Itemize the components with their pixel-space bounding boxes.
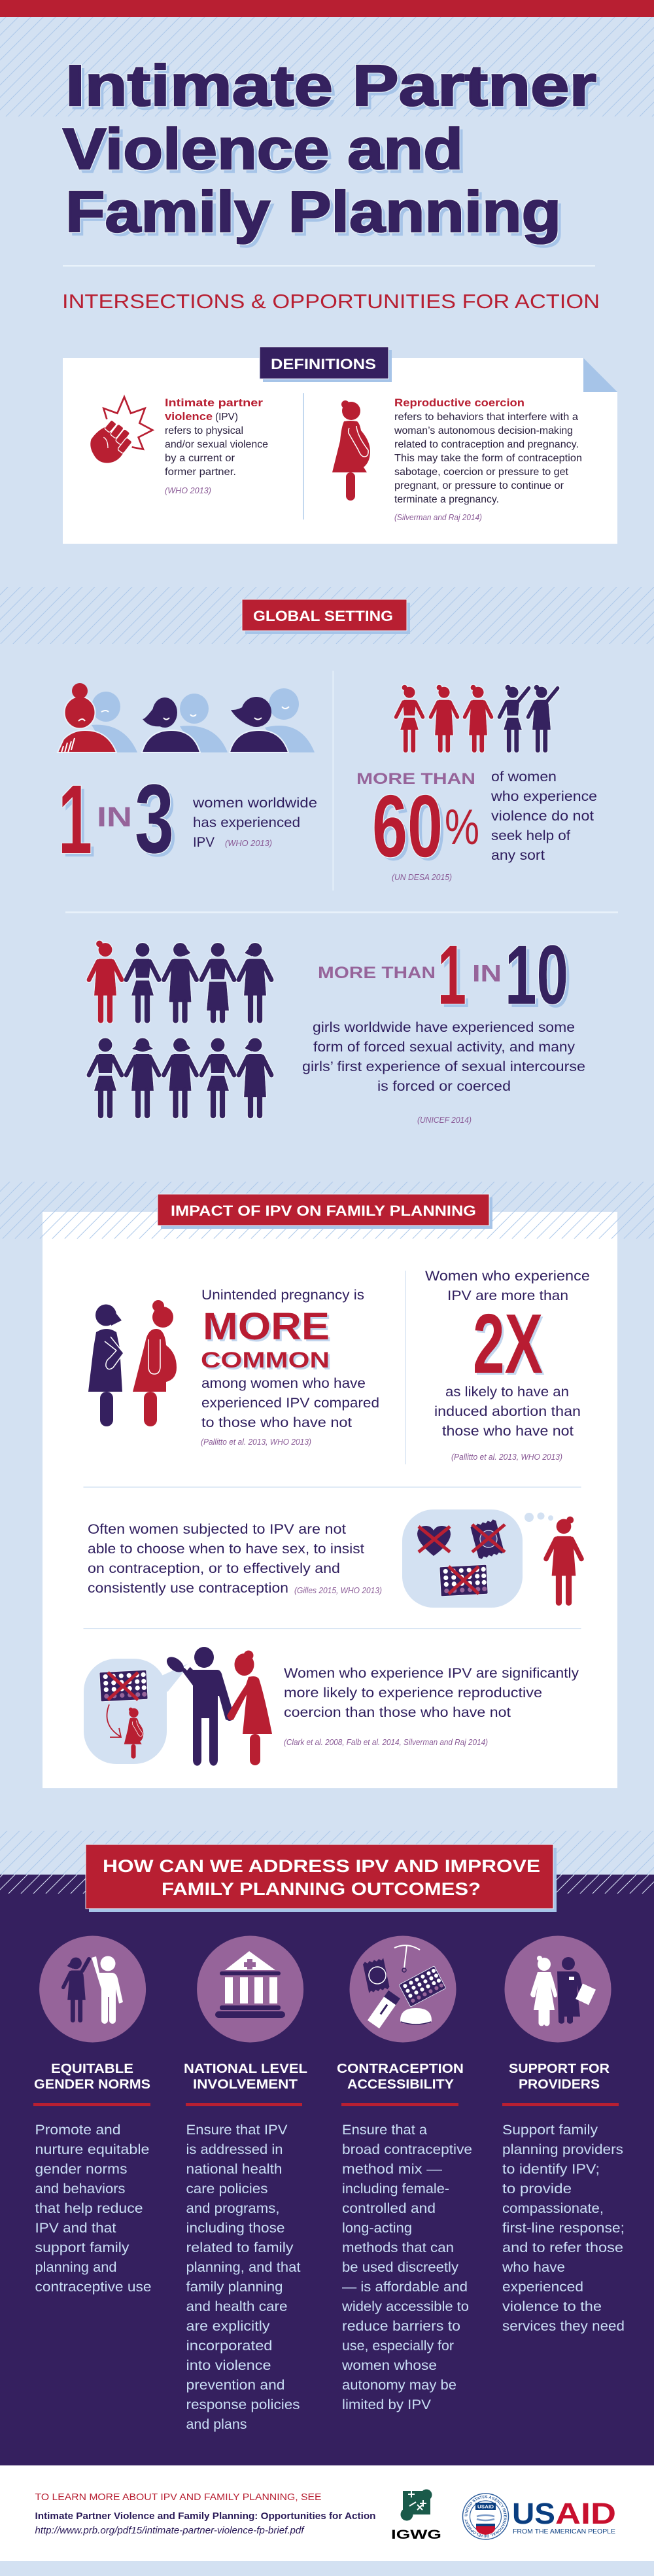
text: 2X as likely: induced abortion than xyxy=(434,1404,581,1419)
text: reproductive coercion likelihood xyxy=(284,1666,579,1747)
icon: people in pairs xyxy=(58,683,315,752)
column: contraception accessibility: use, especially for xyxy=(342,2338,454,2354)
text: often women xyxy=(88,1522,382,1596)
column: national level involvement: related to family xyxy=(186,2240,294,2255)
text: girls worldwide: girls’ first experience of sexual intercourse xyxy=(302,1059,585,1074)
column: national level involvement: Ensure that IPV xyxy=(186,2123,288,2138)
stat: 1 in 3 xyxy=(58,764,174,874)
definition: reproductive coercion: refers to behaviors that interfere with a xyxy=(394,412,578,423)
icon: crossed heart xyxy=(417,1526,451,1556)
text: 2X as likely xyxy=(425,1269,590,1462)
text: of women: of women xyxy=(491,769,557,785)
column: equitable gender norms: nurture equitable xyxy=(35,2142,149,2157)
definition: intimate partner violence: former partner. xyxy=(165,467,236,478)
logo: IGWG xyxy=(391,2489,441,2542)
definition: reproductive coercion: (Silverman and Raj 2014) xyxy=(394,513,482,522)
column: equitable gender norms: and behaviors xyxy=(35,2181,126,2197)
text: often women: on contraception, or to effectively and xyxy=(88,1561,340,1576)
logo: USAID wordmark: FROM THE AMERICAN PEOPLE xyxy=(513,2528,615,2535)
text: of women: who experience xyxy=(490,789,597,804)
definition: intimate partner violence: (IPV) xyxy=(215,412,238,423)
text: reproductive coercion likelihood: more likely to experience reproductive xyxy=(284,1685,542,1701)
footer text: http://www.prb.org/pdf15/intimate-partner-violence-fp-brief.pdf xyxy=(35,2525,305,2536)
text: women worldwide: women worldwide xyxy=(192,796,317,811)
panel: impact of IPV on family planning xyxy=(0,1182,654,1788)
icon: crossed condom xyxy=(470,1519,505,1560)
definitions heading: DEFINITIONS xyxy=(271,356,376,372)
column: equitable gender norms: planning and xyxy=(35,2260,116,2275)
title: Intimate Partner xyxy=(65,53,596,118)
column: contraception accessibility: limited by IPV xyxy=(342,2397,431,2412)
column: national level involvement: response policies xyxy=(186,2397,300,2412)
column: support for providers: services they need xyxy=(502,2319,625,2334)
text: women worldwide: has experienced xyxy=(193,815,300,830)
column: national level involvement: is addressed in xyxy=(186,2142,283,2157)
column: support for providers: planning providers xyxy=(502,2142,623,2157)
column: national level involvement: are explicitly xyxy=(186,2319,270,2334)
stat: more than 60%: MORE THAN xyxy=(356,770,475,788)
text: 2X as likely: IPV are more than xyxy=(447,1288,568,1303)
column: national level involvement: and programs, xyxy=(186,2201,280,2216)
column: equitable gender norms: contraceptive use xyxy=(35,2280,152,2295)
logo: USAID seal: USAID xyxy=(477,2503,494,2510)
column: contraception accessibility: Ensure that a xyxy=(342,2123,427,2138)
definition: reproductive coercion: pregnant, or pressure to continue or xyxy=(394,480,564,491)
text: 2X as likely: (Pallitto et al. 2013, WHO 2013) xyxy=(451,1453,562,1462)
definition: intimate partner violence: and/or sexual violence xyxy=(165,439,268,450)
text: of women: any sort xyxy=(491,848,545,863)
column: equitable gender norms: GENDER NORMS xyxy=(34,2077,150,2092)
column: contraception accessibility: methods that can xyxy=(342,2240,454,2255)
stat: more than 60%: % xyxy=(445,800,479,855)
text: girls worldwide: (UNICEF 2014) xyxy=(417,1116,472,1125)
column: equitable gender norms: gender norms xyxy=(35,2162,127,2177)
text: of women xyxy=(490,769,597,863)
column: contraception accessibility: be used discreetly xyxy=(342,2260,459,2275)
logo: IGWG: IGWG xyxy=(391,2528,441,2542)
text: unintended pregnancy: Unintended pregnancy is xyxy=(201,1288,364,1303)
logo: USAID wordmark xyxy=(512,2497,616,2535)
text: often women: Often women subjected to IPV are not xyxy=(88,1522,346,1537)
top hatch band xyxy=(0,17,654,116)
column: support for providers: first-line response; xyxy=(502,2221,625,2236)
column: support for providers: who have xyxy=(502,2260,565,2275)
column: national level involvement: including those xyxy=(186,2221,285,2236)
stat: more than 1 in 10 xyxy=(318,928,568,1022)
column: contraception accessibility xyxy=(337,2061,472,2412)
text: reproductive coercion likelihood: Women who experience IPV are significantly xyxy=(284,1666,579,1681)
column: contraception accessibility: women whose xyxy=(341,2358,437,2373)
arrow xyxy=(107,1704,121,1737)
icon: crossed pills xyxy=(99,1670,148,1702)
text: women worldwide xyxy=(192,796,317,850)
column: national level involvement: incorporated xyxy=(186,2338,272,2354)
column: national level involvement: NATIONAL LEVEL xyxy=(184,2061,307,2076)
text: often women: consistently use contraception xyxy=(88,1581,288,1596)
global setting hatch band xyxy=(0,587,654,644)
stat: more than 1 in 10: MORE THAN xyxy=(318,964,436,982)
stat: 1 in 3: IN xyxy=(97,802,132,833)
column: national level involvement: and plans xyxy=(186,2417,247,2432)
column: national level involvement: care policies xyxy=(186,2181,268,2197)
icon: five women xyxy=(396,685,558,750)
text: unintended pregnancy: to those who have not xyxy=(201,1415,352,1430)
column: contraception accessibility: reduce barriers to xyxy=(342,2319,460,2334)
column: national level involvement xyxy=(184,2061,307,2432)
icon circle: support for providers xyxy=(505,1935,611,2043)
definition: intimate partner violence: refers to physical xyxy=(165,425,243,436)
text: 2X as likely: those who have not xyxy=(442,1424,574,1439)
text: unintended pregnancy: MORE xyxy=(203,1305,330,1348)
text: of women: violence do not xyxy=(491,809,594,824)
column: contraception accessibility: — is affordable and xyxy=(342,2280,468,2295)
heading: impact: IMPACT OF IPV ON FAMILY PLANNING xyxy=(171,1203,476,1219)
text: girls worldwide xyxy=(302,1020,585,1125)
stat: more than 60%: 60 xyxy=(372,777,443,875)
fold corner xyxy=(583,358,617,392)
definition: reproductive coercion xyxy=(394,397,582,522)
footer text xyxy=(35,2492,375,2536)
heading: impact xyxy=(158,1194,492,1229)
logo: USAID seal: UNITED STATES AGENCY INTERNATIONAL DEVELOPMENT xyxy=(464,2496,507,2537)
text: reproductive coercion likelihood: coercion than those who have not xyxy=(284,1705,511,1720)
column: contraception accessibility: method mix — xyxy=(342,2162,442,2177)
stat: more than 1 in 10: 1 xyxy=(438,928,466,1022)
column: equitable gender norms xyxy=(33,2061,152,2295)
column: equitable gender norms: IPV and that xyxy=(35,2221,116,2236)
column: national level involvement: planning, and that xyxy=(186,2260,301,2275)
heading: how can we address xyxy=(86,1844,557,1912)
text: women worldwide: (WHO 2013) xyxy=(225,839,272,848)
stat: 1 in 3: 1 xyxy=(58,764,92,874)
definition: intimate partner violence: by a current or xyxy=(165,453,235,464)
text: often women: able to choose when to have sex, to insist xyxy=(88,1542,364,1557)
column: national level involvement: family planning xyxy=(186,2280,283,2295)
column: contraception accessibility: controlled and xyxy=(342,2201,436,2216)
icon: thinking woman xyxy=(546,1517,581,1602)
title: Violence and xyxy=(63,116,463,181)
column: national level involvement: prevention and xyxy=(186,2378,285,2393)
speech bubble with pills and pregnancy xyxy=(84,1659,192,1764)
column: national level involvement: into violence xyxy=(186,2358,271,2373)
title: Family Planning xyxy=(65,179,561,244)
text: unintended pregnancy xyxy=(201,1288,379,1447)
column: contraception accessibility: autonomy may be xyxy=(342,2378,456,2393)
column: support for providers: experienced xyxy=(502,2280,583,2295)
icon: man and woman xyxy=(164,1647,272,1766)
column: support for providers: SUPPORT FOR xyxy=(509,2061,610,2076)
thought bubble with blocked contraception xyxy=(402,1509,553,1608)
text: reproductive coercion likelihood: (Clark et al. 2008, Falb et al. 2014, Silverman and Raj 2014) xyxy=(284,1738,488,1747)
column: national level involvement: INVOLVEMENT xyxy=(193,2077,298,2092)
subtitle: INTERSECTIONS & OPPORTUNITIES FOR ACTION xyxy=(62,290,600,313)
column: contraception accessibility: widely accessible to xyxy=(341,2299,469,2314)
panel: definitions xyxy=(63,347,617,544)
icon circle: contraception accessibility xyxy=(349,1935,456,2043)
heading: global setting: GLOBAL SETTING xyxy=(253,608,393,624)
column: contraception accessibility: long-acting xyxy=(342,2221,412,2236)
definitions heading xyxy=(260,347,392,382)
icon: crossed pills xyxy=(439,1564,488,1597)
column: support for providers: PROVIDERS xyxy=(519,2077,600,2092)
column: national level involvement: national health xyxy=(186,2162,283,2177)
column: equitable gender norms: Promote and xyxy=(35,2123,120,2138)
definition: reproductive coercion: woman’s autonomous decision-making xyxy=(394,425,573,436)
text: unintended pregnancy: COMMON xyxy=(201,1348,330,1373)
panel: how can we address IPV xyxy=(0,1831,654,2465)
logo: USAID wordmark: AID xyxy=(555,2497,616,2530)
text: 2X as likely: 2X xyxy=(473,1297,543,1391)
column: support for providers: violence to the xyxy=(502,2299,602,2314)
text: girls worldwide: is forced or coerced xyxy=(377,1079,511,1094)
footer text: TO LEARN MORE ABOUT IPV AND FAMILY PLANNING, SEE xyxy=(35,2492,322,2503)
icon: pregnant woman xyxy=(332,400,370,501)
icon: small pregnant woman xyxy=(124,1708,143,1759)
definition: reproductive coercion: Reproductive coercion xyxy=(394,397,525,409)
definition: intimate partner violence xyxy=(165,397,268,495)
heading: global setting xyxy=(242,599,410,634)
column: support for providers: to provide xyxy=(502,2181,572,2197)
stat: more than 1 in 10: IN xyxy=(472,960,502,987)
text: unintended pregnancy: (Pallitto et al. 2013, WHO 2013) xyxy=(201,1438,311,1447)
text: girls worldwide: girls worldwide have experienced some xyxy=(313,1020,575,1035)
icon circle: national level involvement xyxy=(197,1935,303,2043)
heading: how can we address: FAMILY PLANNING OUTCOMES? xyxy=(162,1879,481,1899)
column: equitable gender norms: EQUITABLE xyxy=(51,2061,133,2076)
footer text: Intimate Partner Violence and Family Planning: Opportunities for Action xyxy=(35,2511,375,2522)
column: support for providers xyxy=(502,2061,625,2334)
text: often women: (Gilles 2015, WHO 2013) xyxy=(294,1586,382,1595)
definition: intimate partner violence: Intimate partner xyxy=(165,397,264,409)
definition: reproductive coercion: sabotage, coercion or pressure to get xyxy=(394,467,569,478)
title xyxy=(63,53,596,244)
definition: reproductive coercion: related to contraception and pregnancy. xyxy=(394,439,579,450)
column: support for providers: compassionate, xyxy=(502,2201,604,2216)
stat: 1 in 3: 3 xyxy=(135,764,174,873)
column: contraception accessibility: CONTRACEPTION xyxy=(337,2061,464,2076)
icon: fist and star xyxy=(90,397,152,463)
text: 2X as likely: as likely to have an xyxy=(445,1385,569,1400)
definition: intimate partner violence: (WHO 2013) xyxy=(165,486,211,495)
column: support for providers: Support family xyxy=(502,2123,598,2138)
text: unintended pregnancy: experienced IPV compared xyxy=(201,1396,379,1411)
column: national level involvement: and health care xyxy=(186,2299,288,2314)
column: contraception accessibility: including female- xyxy=(342,2181,449,2197)
text: of women: seek help of xyxy=(491,828,570,843)
column: equitable gender norms: support family xyxy=(35,2240,129,2255)
stat: more than 60%: (UN DESA 2015) xyxy=(392,873,452,882)
column: contraception accessibility: ACCESSIBILITY xyxy=(347,2077,454,2092)
icon: two women xyxy=(88,1300,177,1426)
icon: ten girls holding hands xyxy=(89,941,271,1116)
column: support for providers: and to refer those xyxy=(502,2240,623,2255)
column: support for providers: to identify IPV; xyxy=(502,2162,600,2177)
definition: reproductive coercion: terminate a pregnancy. xyxy=(394,494,499,505)
definition: intimate partner violence: violence xyxy=(165,411,213,423)
icon circle: equitable gender norms xyxy=(39,1935,146,2043)
top red band xyxy=(0,0,654,17)
text: unintended pregnancy: among women who have xyxy=(201,1376,366,1391)
text: women worldwide: IPV xyxy=(193,835,215,850)
heading: how can we address: HOW CAN WE ADDRESS IPV AND IMPROVE xyxy=(103,1856,540,1876)
text: 2X as likely: Women who experience xyxy=(425,1269,590,1284)
panel: footer xyxy=(0,2465,654,2561)
column: equitable gender norms: that help reduce xyxy=(35,2201,143,2216)
stat: more than 1 in 10: 10 xyxy=(505,928,568,1022)
logo: USAID wordmark: US xyxy=(512,2497,555,2530)
column: contraception accessibility: broad contraceptive xyxy=(342,2142,472,2157)
text: girls worldwide: form of forced sexual activity, and many xyxy=(313,1040,576,1055)
definition: reproductive coercion: This may take the form of contraception xyxy=(394,453,582,464)
